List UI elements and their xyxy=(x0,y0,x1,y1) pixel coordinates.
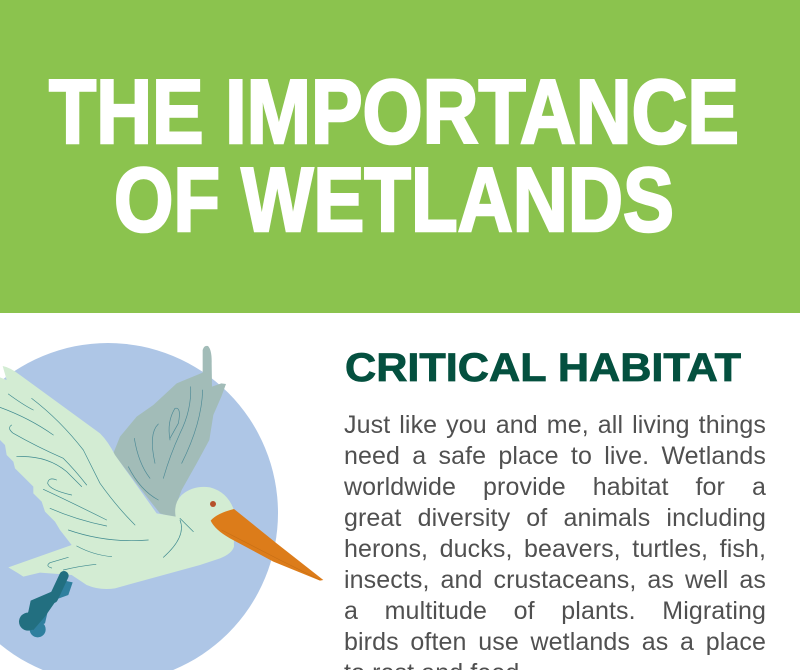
blue circle xyxy=(0,343,278,670)
title xyxy=(48,62,739,251)
far wing xyxy=(113,346,226,518)
eye xyxy=(210,501,216,507)
body text: Just like you and me, all living things xyxy=(344,411,766,439)
body text xyxy=(344,411,766,670)
body text: need a safe place to live. Wetlands xyxy=(344,442,766,470)
near wing feather lines xyxy=(0,394,193,570)
pelican xyxy=(0,346,323,637)
body text: herons, ducks, beavers, turtles, fish, xyxy=(344,535,766,563)
body text: worldwide provide habitat for a xyxy=(344,473,766,501)
body text: a multitude of plants. Migrating xyxy=(344,597,766,625)
far wing feather lines xyxy=(128,387,203,500)
body text: insects, and crustaceans, as well as xyxy=(344,566,766,594)
illustration: pelican in blue circle xyxy=(0,343,324,670)
heading: critical habitat: CRITICAL HABITAT xyxy=(345,346,741,389)
feet xyxy=(19,576,73,637)
title: OF WETLANDS xyxy=(114,150,674,251)
beak xyxy=(211,509,323,581)
body and near wing xyxy=(0,366,234,589)
header banner xyxy=(0,0,800,313)
body text: great diversity of animals including xyxy=(344,504,766,532)
body text: birds often use wetlands as a place xyxy=(344,628,766,656)
